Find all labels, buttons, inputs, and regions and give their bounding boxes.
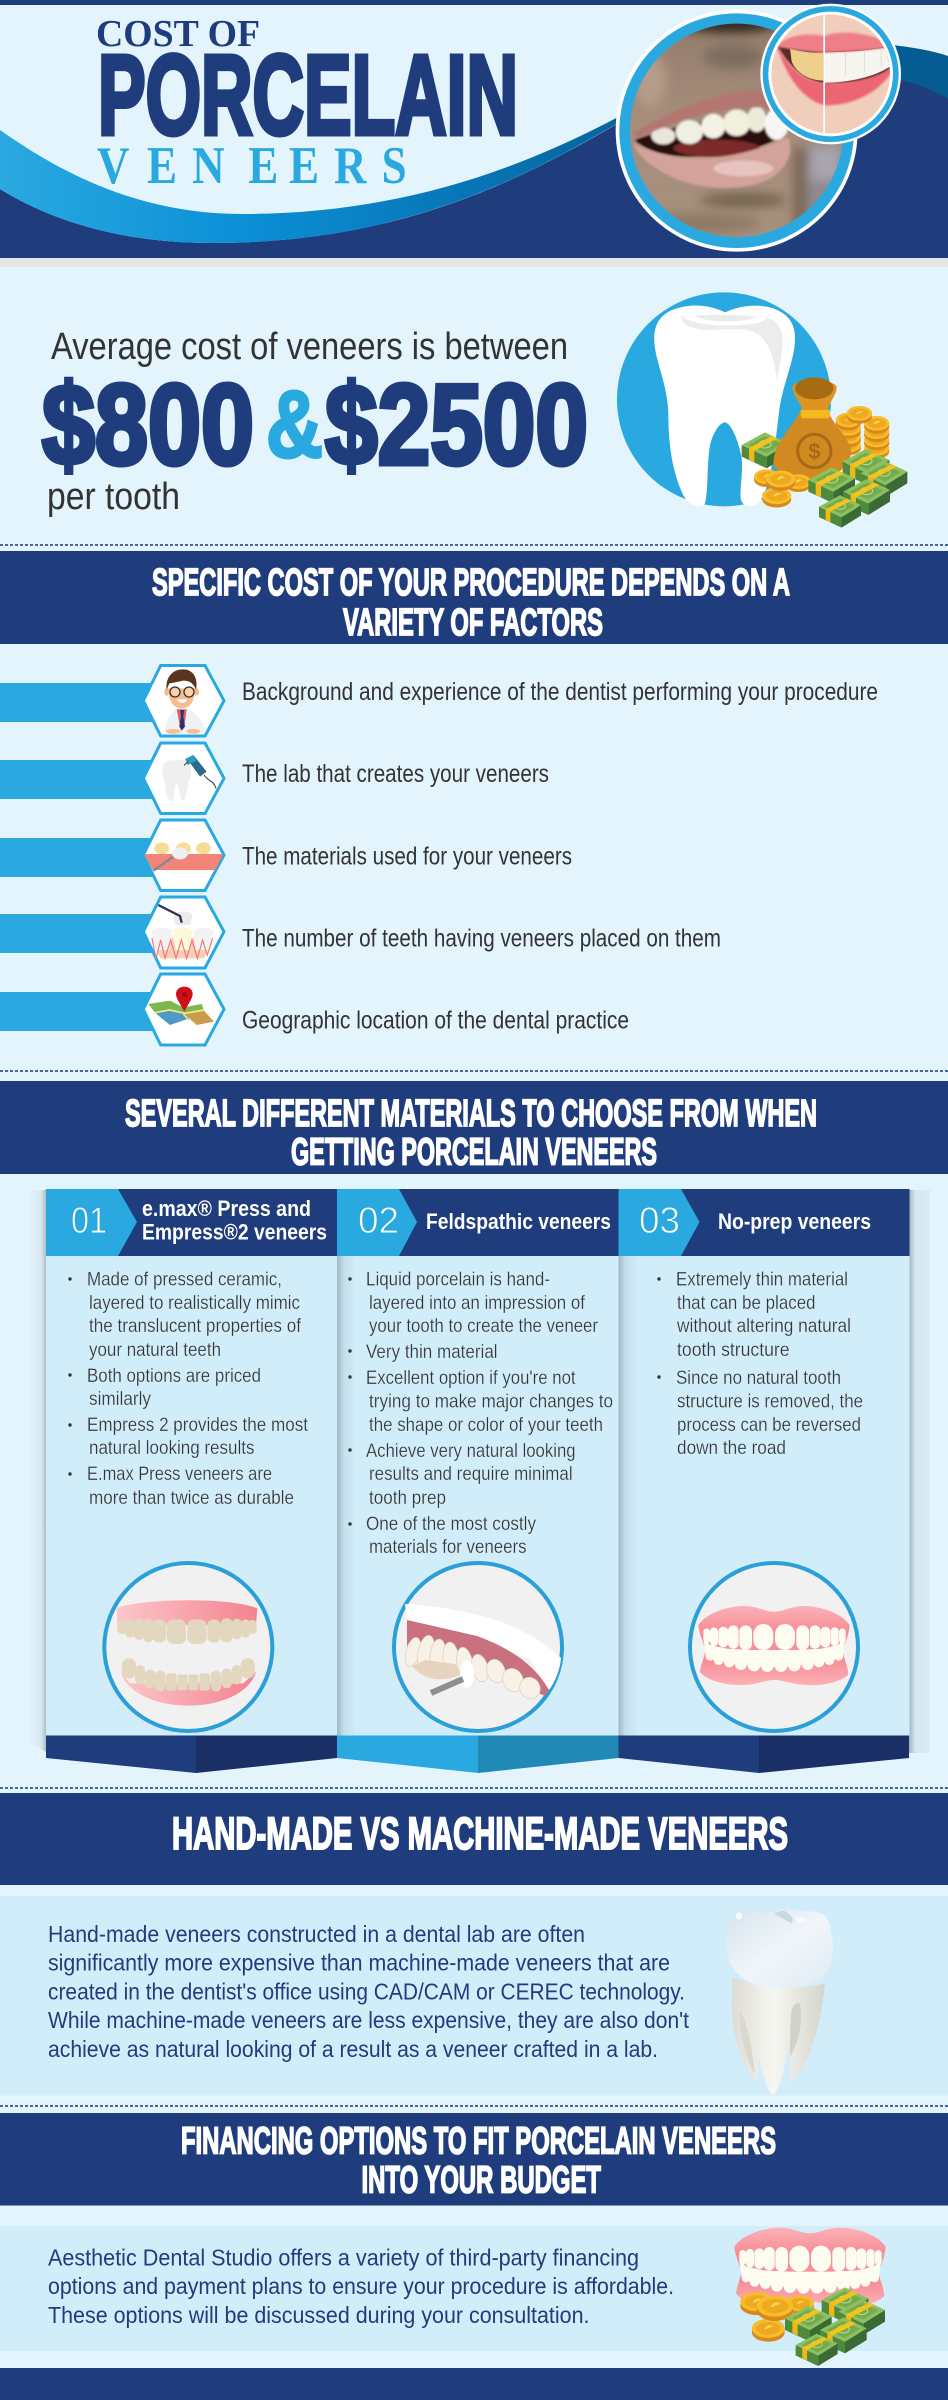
bullet list: layered into an impression of (369, 1292, 585, 1314)
bullet list (348, 1268, 613, 1558)
illustration: white dentures (690, 1563, 858, 1731)
illustration: veneer placement (394, 1563, 562, 1731)
column 2: feldspathic: 02 (358, 1200, 399, 1241)
icon: dentist (164, 669, 205, 734)
panel: financing text (0, 2226, 948, 2351)
dotted divider (0, 2105, 948, 2107)
icon: dentures with money (734, 2228, 886, 2366)
panel: hand-made text: While machine-made veneers are less expensive, they are also don't (48, 2007, 689, 2033)
bullet list: more than twice as durable (89, 1487, 294, 1509)
intro cost text: & (266, 371, 323, 478)
bullet list: Both options are priced (87, 1365, 261, 1387)
icon: tooth and drill (162, 755, 216, 801)
title (96, 13, 518, 195)
panel: hand-made text: Hand-made veneers constructed in a dental lab are often (48, 1921, 585, 1947)
panel: financing text: options and payment plans to ensure your procedure is affordable. (48, 2273, 674, 2299)
panel: hand-made text: significantly more expensive than machine-made veneers that are (48, 1950, 670, 1976)
section banner: materials (0, 1081, 948, 1174)
section banner: materials: GETTING PORCELAIN VENEERS (291, 1132, 657, 1174)
bullet list: the translucent properties of (89, 1315, 301, 1337)
bullet list: materials for veneers (369, 1536, 527, 1558)
factor 4: number of teeth (0, 897, 721, 968)
bullet list: the shape or color of your teeth (369, 1414, 603, 1436)
ribbon (337, 1736, 478, 1773)
section banner: factors (0, 551, 948, 644)
bullet list: that can be placed (677, 1292, 816, 1314)
factor 3: materials (0, 820, 572, 890)
dotted divider (0, 544, 948, 546)
mouth interior (635, 113, 787, 157)
bullet list: tooth prep (369, 1487, 446, 1509)
bullet list: Made of pressed ceramic, (87, 1268, 282, 1290)
column 1: e.max: Empress®2 veneers (142, 1220, 327, 1245)
bullet list: Achieve very natural looking (366, 1440, 576, 1462)
bullet list: results and require minimal (369, 1463, 573, 1485)
bullet list: without altering natural (676, 1315, 851, 1337)
panel: hand-made text: achieve as natural looking of a result as a veneer crafted in a lab. (48, 2036, 658, 2062)
factor 2: lab: The lab that creates your veneers (242, 760, 549, 788)
bullet list: process can be reversed (677, 1414, 861, 1436)
panel: hand-made text: created in the dentist's office using CAD/CAM or CEREC technology. (48, 1978, 685, 2004)
upper lip (633, 91, 787, 138)
factor 5: location (0, 974, 629, 1045)
lower lip (777, 45, 895, 105)
right swoosh (880, 44, 948, 98)
bullet list: your tooth to create the veneer (369, 1315, 598, 1337)
bullet list: One of the most costly (366, 1513, 536, 1535)
title: COST OF (96, 13, 260, 55)
column 1: e.max: 01 (71, 1200, 107, 1241)
dotted divider (0, 1787, 948, 1789)
intro cost text (42, 326, 588, 518)
intro cost text: per tooth (47, 476, 180, 518)
bullet list: similarly (89, 1388, 151, 1410)
bullet list: Since no natural tooth (676, 1367, 841, 1389)
icon: teeth with veneer (151, 905, 213, 958)
lower lip (633, 137, 790, 188)
icon: map pin (148, 987, 214, 1025)
bullet list: trying to make major changes to (369, 1391, 613, 1413)
section banner: financing (0, 2113, 948, 2206)
column 1: e.max (46, 1189, 337, 1773)
bullet list: your natural teeth (89, 1339, 221, 1361)
intro cost text: Average cost of veneers is between (51, 326, 568, 368)
factor 2: lab (0, 743, 549, 814)
bullet list: tooth structure (677, 1339, 790, 1361)
bullet list (657, 1268, 863, 1459)
panel: financing text: Aesthetic Dental Studio offers a variety of third-party financing (48, 2245, 639, 2271)
front coins (762, 487, 791, 508)
section banner: hand-made vs machine-made (0, 1793, 948, 1885)
factor 5: location: Geographic location of the dental practice (242, 1007, 629, 1035)
money bag (773, 412, 851, 480)
navy wave background (0, 60, 948, 258)
bullet list: Very thin material (366, 1341, 498, 1363)
dotted divider (0, 1070, 948, 1072)
header banner (0, 0, 948, 267)
title: VENEERS (97, 136, 407, 195)
column 3: no-prep: No-prep veneers (718, 1209, 871, 1234)
intro cost text: $800 (42, 362, 254, 489)
icon: tooth with money (617, 292, 907, 528)
column 3: no-prep (618, 1189, 910, 1773)
icon: tooth with money: $ (808, 439, 820, 464)
bullet list (68, 1268, 308, 1509)
bullet list: E.max Press veneers are (87, 1463, 272, 1485)
icon: gums with veneer (144, 842, 223, 871)
bullet list: down the road (677, 1437, 786, 1459)
title: PORCELAIN (98, 32, 518, 158)
coin stack back (836, 438, 861, 455)
section banner: financing: INTO YOUR BUDGET (362, 2159, 601, 2201)
bullet list: Excellent option if you're not (366, 1367, 576, 1389)
panel: financing text: These options will be discussed during your consultation. (48, 2302, 590, 2328)
bullet list: natural looking results (89, 1437, 255, 1459)
teeth (790, 48, 823, 81)
ribbon (618, 1736, 759, 1773)
bullet list: Empress 2 provides the most (87, 1414, 308, 1436)
factor 4: number of teeth: The number of teeth having veneers placed on them (242, 924, 721, 952)
column 2: feldspathic (337, 1189, 618, 1773)
section banner: factors: VARIETY OF FACTORS (343, 602, 603, 644)
column 1: e.max: e.max® Press and (142, 1196, 311, 1221)
ribbon (46, 1736, 196, 1773)
column 3: no-prep: 03 (639, 1200, 680, 1241)
factor 3: materials: The materials used for your veneers (242, 842, 572, 870)
column 2: feldspathic: Feldspathic veneers (426, 1209, 611, 1234)
photo: man's smile in a circle (616, 4, 901, 252)
panel: hand-made text (0, 1896, 948, 2096)
blue swoosh (0, 116, 620, 243)
teeth (651, 128, 675, 144)
illustration: stained teeth (104, 1563, 272, 1731)
bullet list: Liquid porcelain is hand- (366, 1268, 550, 1290)
bullet list: layered to realistically mimic (89, 1292, 300, 1314)
icon: molar tooth (727, 1909, 833, 2095)
bills (843, 449, 889, 485)
footer bar (0, 2368, 948, 2400)
intro cost text: $2500 (325, 362, 588, 489)
materials panel shadows (30, 1190, 930, 1753)
bullet list: Extremely thin material (676, 1268, 848, 1290)
bullet list: structure is removed, the (677, 1391, 863, 1413)
upper lip (777, 33, 889, 52)
factor 1: dentist experience (0, 666, 878, 736)
